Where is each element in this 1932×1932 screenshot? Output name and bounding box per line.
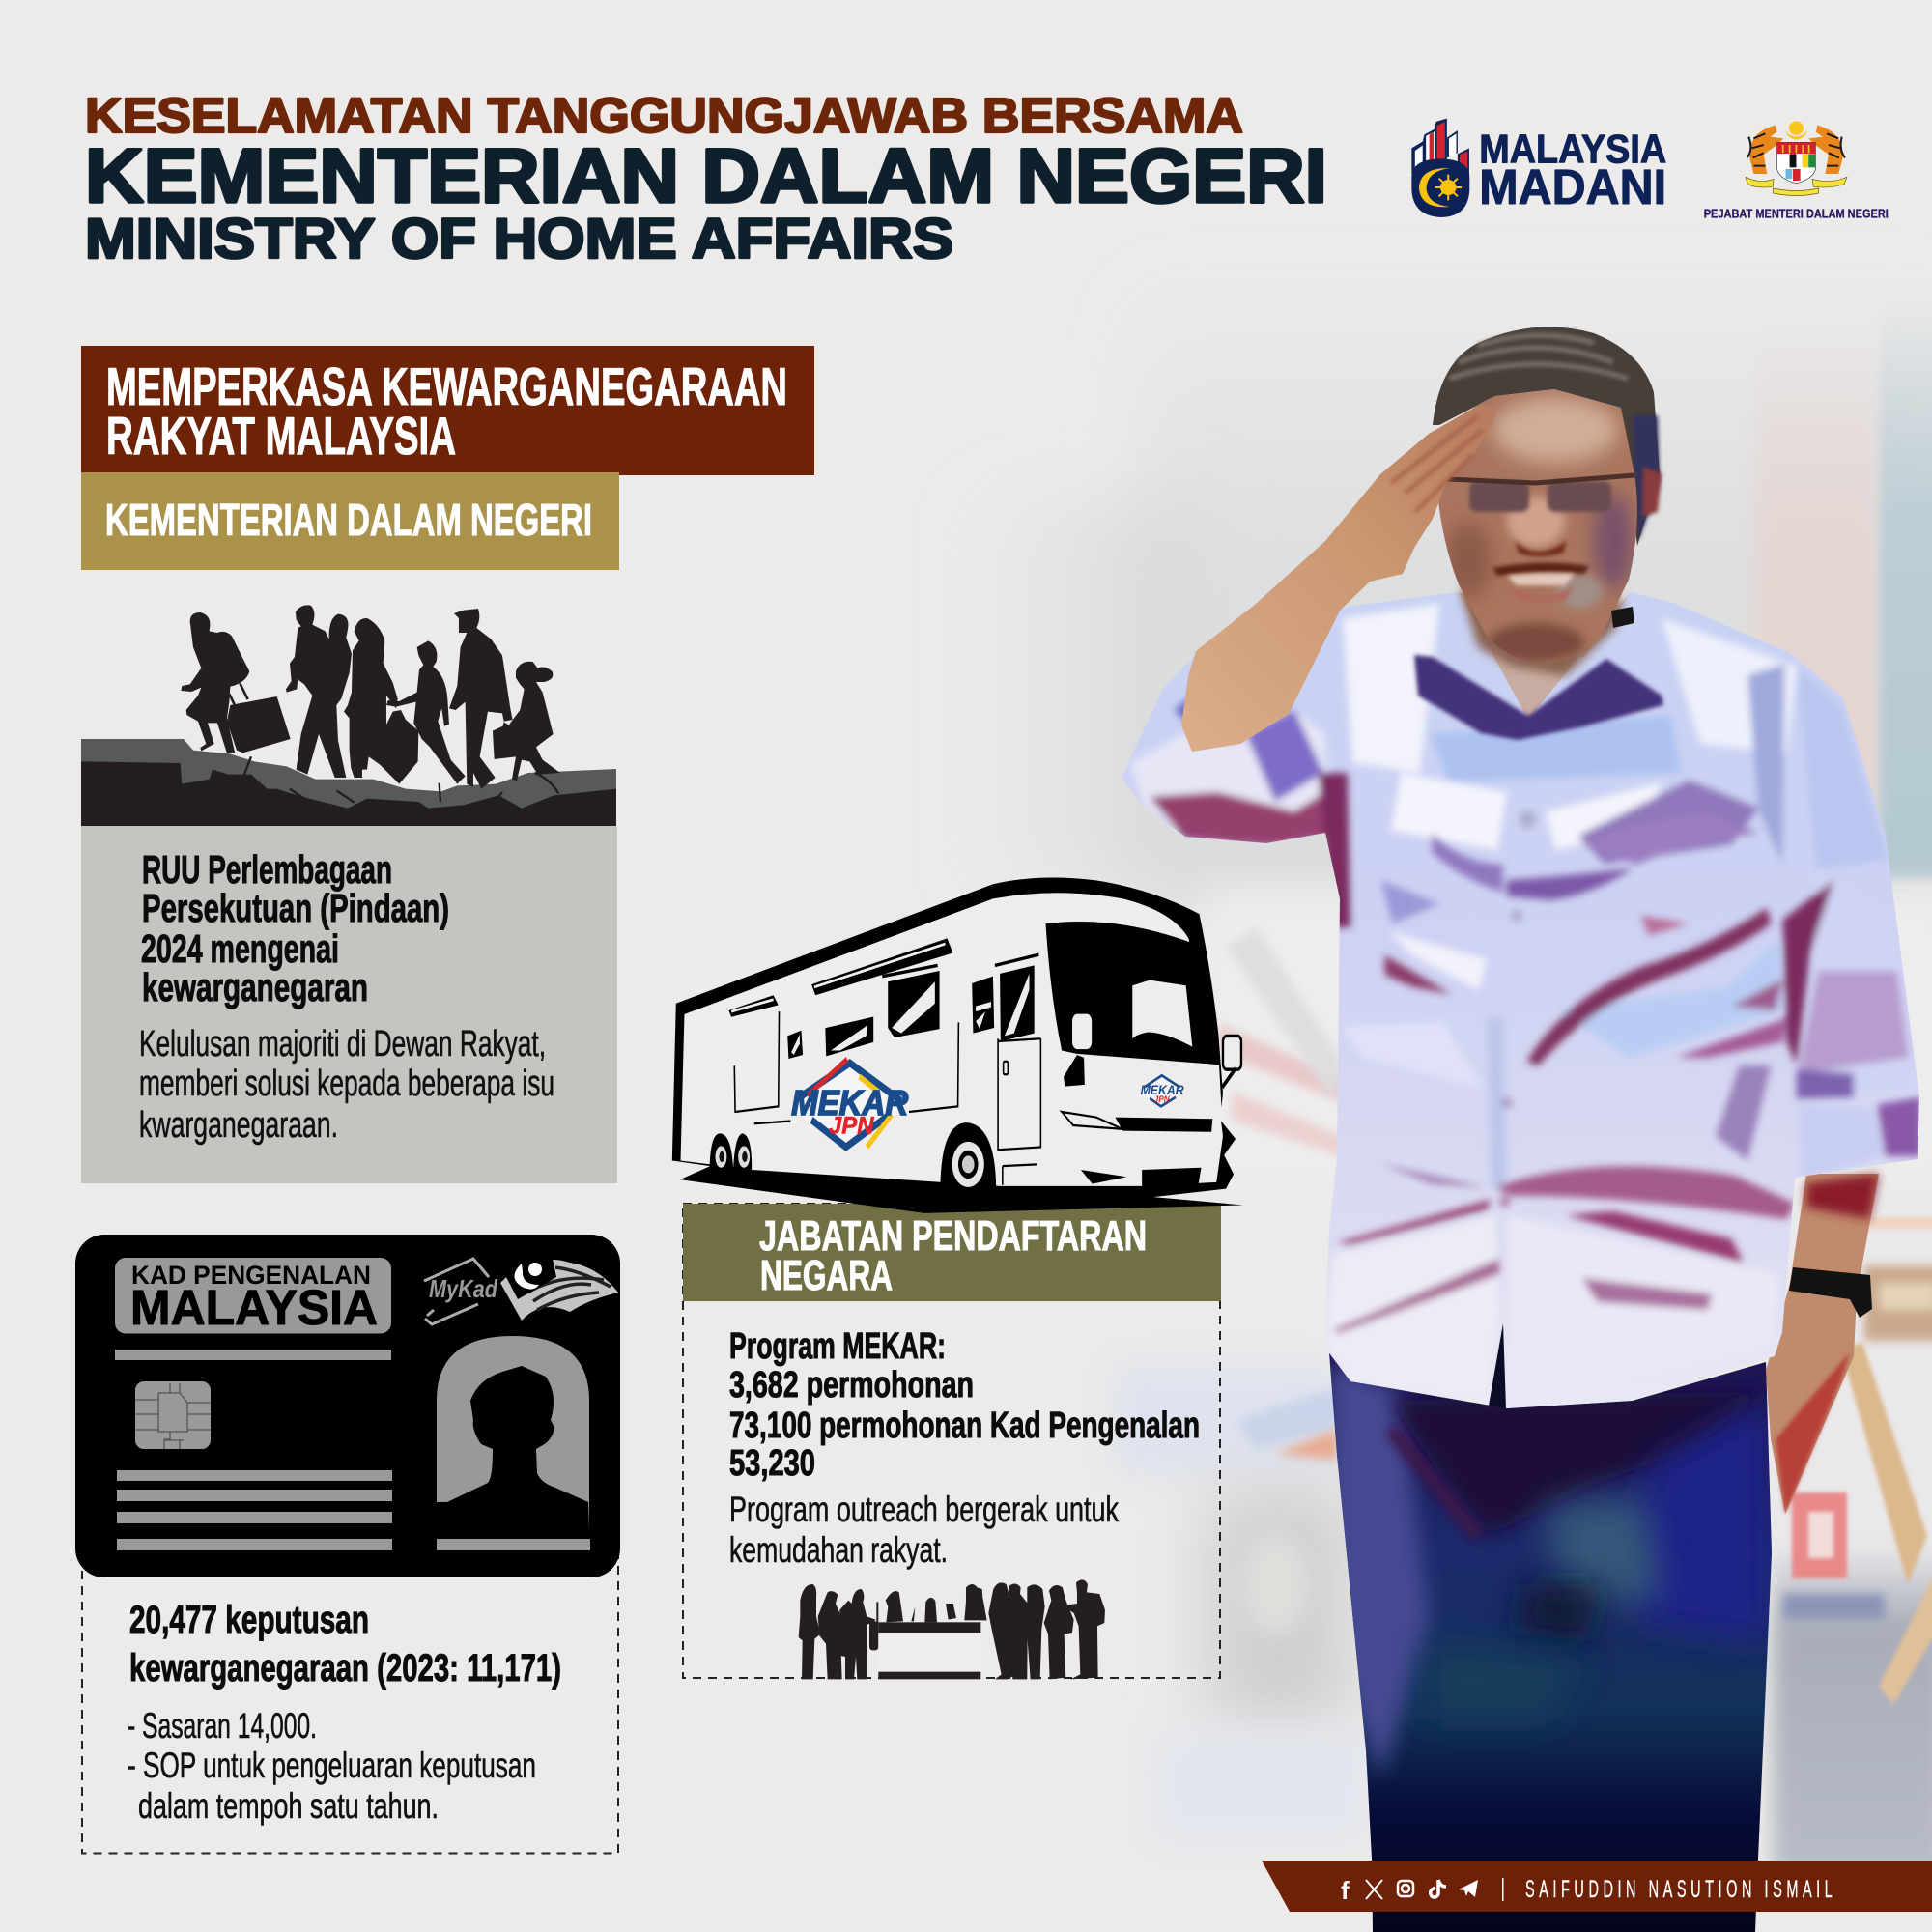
title block (85, 88, 1327, 270)
MEKAR JPN logo large: JPN (829, 1112, 874, 1139)
left sleeve shading (1130, 696, 1350, 927)
illustration: MEKAR JPN bus (672, 877, 1243, 1213)
illustration: queue at counter (799, 1579, 1105, 1679)
icon: tiktok (1431, 1880, 1446, 1897)
section heading: Jabatan Pendaftaran Negara (683, 1204, 1221, 1301)
MEKAR stats: 53,230 (729, 1443, 815, 1484)
icon: telegram (1459, 1880, 1478, 1897)
shirt (1122, 592, 1920, 1408)
lights and grille (1062, 1112, 1122, 1129)
figure: woman with duffel (344, 618, 418, 784)
decisions body: - SOP untuk pengeluaran keputusan (128, 1746, 536, 1785)
trousers (1323, 1352, 1777, 1932)
headset mic (1611, 607, 1634, 628)
photo: minister saluting (1122, 327, 1920, 1932)
heading banner: Memperkasa kewarganegaraan: MEMPERKASA KEWARGANEGARAAN (106, 356, 787, 416)
figure: adult carrying child (286, 605, 352, 778)
ground (81, 739, 616, 826)
logo: Pejabat Menteri Dalam Negeri coat of arms (1704, 121, 1889, 220)
logo: Malaysia Madani: MADANI (1479, 159, 1666, 214)
MEKAR JPN logo large: MEKAR (791, 1083, 909, 1122)
card label (115, 1258, 391, 1335)
photo silhouette (437, 1336, 589, 1530)
bus body (681, 893, 1223, 1186)
card label: KAD PENGENALAN (131, 1261, 371, 1290)
MEKAR JPN logo large (788, 1060, 909, 1151)
panel body text: Kelulusan majoriti di Dewan Rakyat, (139, 1024, 546, 1065)
decisions body (128, 1706, 536, 1826)
shirt folds (1130, 604, 1920, 1401)
MEKAR JPN logo small (1140, 1074, 1184, 1108)
collar (1414, 655, 1663, 740)
heading banner: Memperkasa kewarganegaraan (81, 346, 814, 475)
MEKAR JPN logo small: MEKAR (1141, 1082, 1184, 1097)
flag (500, 1258, 618, 1321)
office name: PEJABAT MENTERI DALAM NEGERI (1704, 207, 1889, 220)
MyKad wordmark (424, 1259, 498, 1324)
outreach description (729, 1490, 1119, 1570)
mirrors (1071, 1012, 1093, 1051)
nose and mouth (1515, 541, 1567, 556)
saluting forearm and hand (1181, 404, 1497, 752)
MEKAR stats: 3,682 permohonan (729, 1365, 974, 1406)
icon: MyKad identity card (75, 1235, 620, 1577)
section heading: Jabatan Pendaftaran Negara: JABATAN PENDAFTARAN (759, 1212, 1147, 1260)
watch (1789, 1267, 1872, 1318)
icon: instagram (1398, 1881, 1413, 1896)
title line 3: MINISTRY OF HOME AFFAIRS (85, 208, 953, 270)
windows and panels (728, 938, 1040, 1185)
outreach description: kemudahan rakyat. (729, 1530, 948, 1570)
panel heading: Persekutuan (Pindaan) (142, 886, 449, 930)
heading banner: Memperkasa kewarganegaraan: RAKYAT MALAYSIA (106, 406, 456, 466)
footer bar (1262, 1861, 1932, 1912)
decisions heading: kewarganegaraan (2023: 11,171) (129, 1647, 561, 1690)
section heading: Jabatan Pendaftaran Negara: NEGARA (760, 1252, 893, 1299)
panel body text: memberi solusi kepada beberapa isu (139, 1064, 554, 1104)
panel: RUU Perlembagaan (81, 826, 617, 1183)
decisions body: - Sasaran 14,000. (128, 1706, 317, 1746)
panel heading: RUU Perlembagaan (142, 847, 392, 892)
sub-heading banner: Kementerian Dalam Negeri: KEMENTERIAN DALAM NEGERI (105, 495, 592, 545)
MEKAR stats: 73,100 permohonan Kad Pengenalan (729, 1406, 1200, 1446)
figure: girl with bag (493, 662, 560, 781)
chip (135, 1381, 211, 1449)
logo wordmark: MALAYSIA (1479, 127, 1666, 171)
head (1433, 327, 1662, 664)
MEKAR JPN logo small: JPN (1154, 1094, 1170, 1104)
decisions heading: 20,477 keputusan (129, 1599, 369, 1641)
sub-heading banner: Kementerian Dalam Negeri (81, 472, 619, 570)
title line 2: KEMENTERIAN DALAM NEGERI (85, 132, 1327, 218)
dashed box: citizenship decisions (82, 1546, 618, 1853)
panel heading: kewarganegaran (142, 965, 368, 1009)
MEKAR stats: Program MEKAR: (729, 1326, 946, 1367)
panel heading: 2024 mengenai (141, 926, 339, 971)
background: blurred stage photo (966, 280, 1932, 1874)
wheels (710, 1122, 996, 1187)
decisions body: dalam tempoh satu tahun. (138, 1786, 439, 1826)
title line 1: KESELAMATAN TANGGUNGJAWAB BERSAMA (85, 88, 1243, 143)
figure: tall man (449, 609, 513, 789)
logo: Malaysia Madani (1411, 119, 1666, 217)
panel heading (141, 847, 449, 1009)
card label: MALAYSIA (130, 1280, 378, 1335)
MEKAR stats (729, 1326, 1200, 1484)
decisions heading (129, 1599, 561, 1690)
outreach description: Program outreach bergerak untuk (729, 1490, 1119, 1529)
left hand and forearm (lower) (1766, 1174, 1879, 1514)
footer name: SAIFUDDIN NASUTION ISMAIL (1525, 1877, 1833, 1903)
panel body text (139, 1024, 554, 1146)
neck (1459, 592, 1631, 720)
panel body text: kwarganegaraan. (139, 1105, 338, 1146)
figure: boy (386, 640, 466, 784)
shirt front opening (1489, 1323, 1506, 1408)
glasses (1469, 481, 1529, 512)
windshield (1046, 922, 1219, 1065)
dashed box: JPN section (683, 1204, 1221, 1679)
figure: running man with suitcase (181, 612, 291, 753)
icon: X (1366, 1880, 1382, 1899)
icon: facebook: f (1341, 1876, 1350, 1905)
illustration: family walking silhouette (81, 605, 616, 826)
MyKad wordmark: MyKad (429, 1274, 498, 1303)
